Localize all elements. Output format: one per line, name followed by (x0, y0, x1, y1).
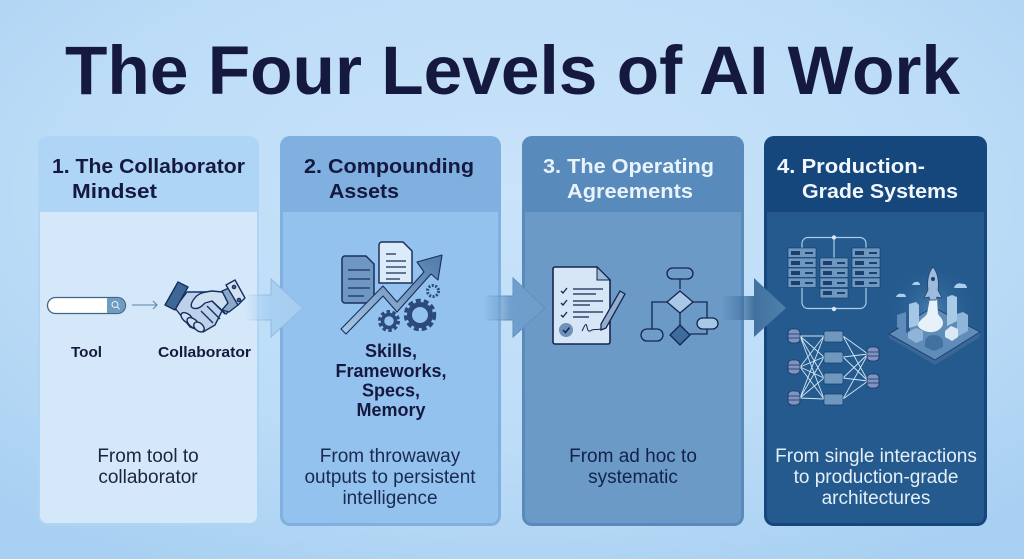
title: The Four Levels of AI Work (65, 32, 961, 109)
heading: level 3: Agreements (567, 180, 693, 203)
arrow: level 1 to 2 (245, 279, 303, 337)
icon: handshake (165, 280, 245, 334)
arrow: tool to collaborator (132, 301, 157, 309)
heading: level 2: 2. Compounding (304, 155, 474, 178)
icon: documents, growth arrow and gears (341, 242, 442, 334)
body text: level 3: From ad hoc to (569, 446, 697, 467)
body text: level 2: intelligence (342, 488, 438, 509)
arrow: level 2 to 3 (483, 278, 545, 337)
icon: flowchart (641, 268, 718, 345)
label: skills, frameworks, specs, memory: Memory (356, 400, 426, 420)
body text: level 1: From tool to (97, 446, 199, 467)
label: skills, frameworks, specs, memory: Frameworks, (335, 361, 447, 381)
body text: level 4: architectures (822, 488, 930, 509)
icon: rocket launching over a city (887, 264, 980, 365)
label: skills, frameworks, specs, memory: Specs, (362, 380, 420, 400)
heading: level 3: 3. The Operating (543, 155, 714, 178)
arrow: level 3 to 4 (722, 278, 786, 337)
heading: level 4: 4. Production- (777, 155, 925, 178)
label: collaborator: Collaborator (158, 344, 251, 361)
panel 2: compounding assets (280, 136, 501, 526)
panel 1: the collaborator mindset (38, 136, 259, 526)
body text: level 2: outputs to persistent (304, 467, 476, 488)
panel 3: the operating agreements (522, 136, 744, 526)
body text: level 4: From single interactions (775, 446, 977, 467)
icon: search bar (48, 298, 126, 314)
heading: level 1: Mindset (72, 180, 157, 203)
body text: level 3: systematic (588, 467, 678, 488)
icon: database tables (788, 235, 880, 311)
body text: level 4: to production-grade (794, 467, 958, 488)
heading: level 4: Grade Systems (802, 180, 958, 203)
icon: signed checklist (553, 267, 625, 344)
body text: level 2: From throwaway (320, 446, 461, 467)
label: tool: Tool (71, 344, 102, 361)
heading: level 1: 1. The Collaborator (52, 155, 245, 178)
heading: level 2: Assets (329, 180, 399, 203)
panel 4: production-grade systems (764, 136, 987, 526)
label: skills, frameworks, specs, memory: Skills, (365, 341, 417, 361)
icon: neural network of data stores (788, 329, 879, 405)
body text: level 1: collaborator (98, 467, 198, 488)
